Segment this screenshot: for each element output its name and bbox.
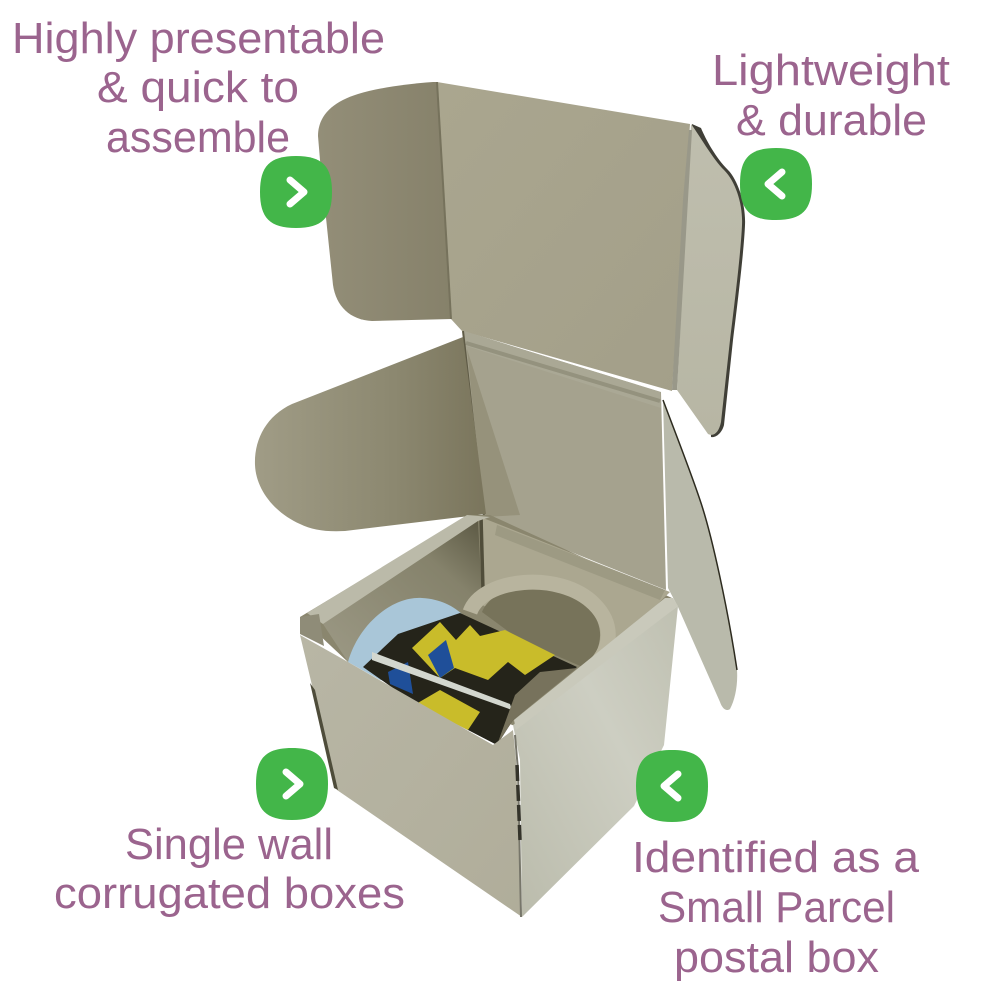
- box interior: [300, 515, 672, 726]
- seam shadow: [517, 765, 520, 840]
- lower left lid flap: [255, 337, 486, 531]
- label: lightweight: [712, 46, 950, 145]
- lid panel: [437, 82, 692, 391]
- label: highly presentable: assemble: [106, 113, 290, 162]
- side flap dark edge: [663, 400, 737, 670]
- button: top right: [740, 148, 812, 220]
- right lid flap: [677, 124, 745, 437]
- label: highly presentable: [12, 14, 385, 162]
- button: bottom left: [256, 748, 328, 820]
- label: lightweight: & durable: [736, 96, 927, 145]
- label: small parcel: Identified as a: [632, 833, 920, 882]
- right rim: [514, 598, 678, 730]
- label: single wall: Single wall: [125, 820, 333, 869]
- side flap, lower right: [663, 400, 737, 710]
- button: bottom right: [636, 750, 708, 822]
- label: single wall: [54, 820, 405, 918]
- top-left lid flap: [318, 82, 452, 321]
- left edge shadow: [310, 683, 338, 790]
- label: small parcel: Small Parcel: [658, 883, 895, 932]
- mug: [348, 582, 608, 745]
- mug body, blue side: [348, 598, 500, 700]
- label: highly presentable: Highly presentable: [12, 14, 385, 63]
- front corner seam: [515, 735, 521, 917]
- mug handle: [470, 582, 608, 666]
- label: small parcel: [632, 833, 920, 982]
- mug handle hole: [482, 587, 600, 668]
- label: lightweight: Lightweight: [712, 46, 950, 95]
- box illustration: [255, 82, 745, 917]
- button: top left: [260, 156, 332, 228]
- right front face: [513, 606, 678, 917]
- back panel with crease: [463, 331, 666, 590]
- label: small parcel: postal box: [674, 933, 879, 982]
- mug print: [363, 613, 577, 745]
- label: highly presentable: & quick to: [97, 63, 299, 112]
- left front face: [300, 635, 522, 917]
- label: single wall: corrugated boxes: [54, 869, 405, 918]
